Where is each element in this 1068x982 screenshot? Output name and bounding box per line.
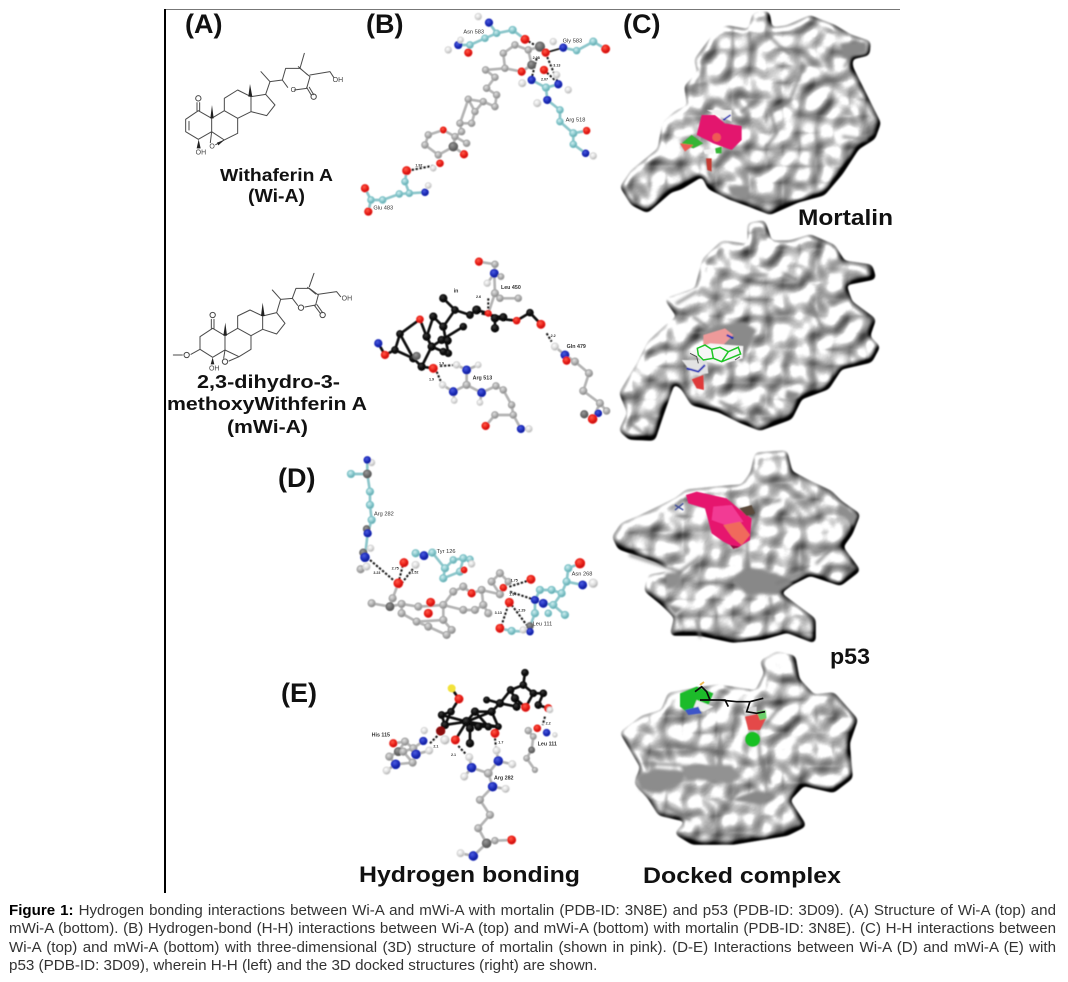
hydrogen bonding diagram: Wi-A with p53: Tyr 126: [437, 549, 456, 555]
name: 2,3-dihydro-3-methoxyWithaferin A: 2,3-dihydro-3-: [197, 372, 340, 392]
panel label E: (E): [281, 678, 317, 708]
hydrogen bonding diagram: mWi-A with mortalin: 2.2: [551, 334, 556, 338]
panel label A: (A): [185, 9, 222, 39]
name: Withaferin A: Withaferin A: [220, 165, 333, 185]
hydrogen bonding diagram: Wi-A with p53: [347, 457, 598, 639]
hydrogen bonding diagram: mWi-A with p53: Arg 282: [494, 776, 514, 782]
hydrogen bonding diagram: mWi-A with p53: [372, 669, 557, 860]
figure caption: mWi-A (bottom). (B) Hydrogen-bond (H-H) interactions between Wi-A (top) and mWi-A (bottom) with mortalin (PDB-ID: 3N8E). (C) H-H interactions between: [9, 920, 1056, 937]
hydrogen bonding diagram: Wi-A with p53: 1.52: [411, 571, 418, 575]
hydrogen bonding diagram: Wi-A with p53: Arg 282: [374, 512, 394, 518]
hydrogen bonding diagram: mWi-A with p53: 1.7: [498, 740, 503, 744]
label: Docked complex: Docked complex: [643, 863, 842, 888]
name: Withaferin A: (Wi-A): [248, 186, 305, 206]
hydrogen bonding diagram: Wi-A with mortalin: 2.07: [541, 78, 548, 82]
hydrogen bonding diagram: Wi-A with p53: Leu 111: [533, 621, 552, 627]
hydrogen bonding diagram: mWi-A with mortalin: Leu 450: [501, 285, 521, 291]
chemical structure: Withaferin A: OH: [333, 77, 343, 84]
hydrogen bonding diagram: Wi-A with mortalin: 3.13: [553, 64, 560, 68]
hydrogen bonding diagram: Wi-A with p53: 1.75: [511, 578, 518, 582]
hydrogen bonding diagram: Wi-A with p53: 3.23: [373, 571, 380, 575]
hydrogen bonding diagram: mWi-A with mortalin: Arg 513: [473, 375, 492, 381]
hydrogen bonding diagram: mWi-A with p53: 2.2: [546, 722, 551, 726]
figure caption: Wi-A (top) and mWi-A (bottom) with three-dimensional (3D) structure of mortalin (shown in pink). (D-E) Interactions between Wi-A (D) and mWi-A (E) with: [9, 939, 1056, 956]
hydrogen bonding diagram: Wi-A with p53: 3.13: [495, 611, 502, 615]
hydrogen bonding diagram: Wi-A with p53: 2.29: [518, 608, 525, 612]
name: 2,3-dihydro-3-methoxyWithaferin A: methoxyWithferin A: [167, 394, 367, 414]
chemical structure: Withaferin A: O: [291, 87, 297, 94]
figure caption: Figure 1: Hydrogen bonding interactions between Wi-A and mWi-A with mortalin (PDB-ID: 3N8E) and p53 (PDB-ID: 3D09). (A) Structure of Wi-A (top) and: [9, 902, 1056, 919]
hydrogen bonding diagram: Wi-A with mortalin: 1.92: [415, 163, 422, 167]
hydrogen bonding diagram: Wi-A with mortalin: 2.08: [533, 56, 540, 60]
panel label D: (D): [278, 463, 315, 493]
chemical structure: 2,3-dihydro-3-methoxyWithaferin A: [173, 273, 352, 372]
hydrogen bonding diagram: Wi-A with mortalin: Arg 518: [566, 117, 585, 123]
hydrogen bonding diagram: mWi-A with mortalin: 1.9: [439, 362, 444, 366]
label: p53: p53: [830, 644, 870, 669]
protein surface: p53 with mWi-A: [623, 654, 855, 842]
chemical structure: Withaferin A: [186, 53, 343, 157]
protein surface: p53 with Wi-A: [615, 453, 858, 640]
chemical structure: 2,3-dihydro-3-methoxyWithaferin A: OH: [209, 365, 219, 372]
name: Withaferin A: [220, 165, 333, 206]
hydrogen bonding diagram: mWi-A with p53: His 115: [372, 732, 390, 738]
figure frame: [164, 9, 900, 893]
hydrogen bonding diagram: Wi-A with p53: 2.75: [392, 566, 399, 570]
hydrogen bonding diagram: Wi-A with p53: Asn 268: [572, 572, 592, 578]
figure caption: [9, 902, 1056, 974]
hydrogen bonding diagram: Wi-A with mortalin: Asn 583: [463, 29, 484, 35]
hydrogen bonding diagram: mWi-A with p53: 2.1: [451, 753, 456, 757]
label: Mortalin: Mortalin: [798, 205, 893, 230]
chemical structure: 2,3-dihydro-3-methoxyWithaferin A: OH: [342, 296, 352, 303]
chemical structure: Withaferin A: O: [209, 143, 215, 150]
name: 2,3-dihydro-3-methoxyWithaferin A: (mWi-A): [227, 417, 308, 437]
label: Hydrogen bonding: Hydrogen bonding: [359, 862, 580, 887]
hydrogen bonding diagram: mWi-A with mortalin: 2.6: [476, 295, 481, 299]
protein surface: mortalin with Wi-A: [623, 14, 878, 212]
panel label B: (B): [366, 9, 403, 39]
hydrogen bonding diagram: mWi-A with mortalin: in: [454, 288, 458, 294]
protein surface: mortalin with mWi-A: [622, 223, 877, 438]
hydrogen bonding diagram: mWi-A with mortalin: 1.9: [429, 378, 434, 382]
hydrogen bonding diagram: mWi-A with mortalin: Gln 479: [567, 344, 586, 350]
panel label C: (C): [623, 9, 660, 39]
hydrogen bonding diagram: mWi-A with mortalin: [375, 258, 610, 433]
hydrogen bonding diagram: Wi-A with p53: 1.84: [509, 593, 517, 597]
hydrogen bonding diagram: Wi-A with mortalin: Glu 483: [373, 205, 393, 211]
hydrogen bonding diagram: mWi-A with p53: Leu 111: [538, 742, 557, 748]
chemical structure: Withaferin A: OH: [196, 150, 206, 157]
hydrogen bonding diagram: mWi-A with p53: 2.1: [433, 744, 438, 748]
hydrogen bonding diagram: Wi-A with mortalin: Gly 583: [563, 39, 582, 45]
name: 2,3-dihydro-3-methoxyWithaferin A: [167, 372, 367, 437]
figure caption: p53 (PDB-ID: 3D09), wherein H-H (left) and the 3D docked structures (right) are shown.: [9, 957, 597, 974]
hydrogen bonding diagram: Wi-A with mortalin: [361, 13, 610, 215]
